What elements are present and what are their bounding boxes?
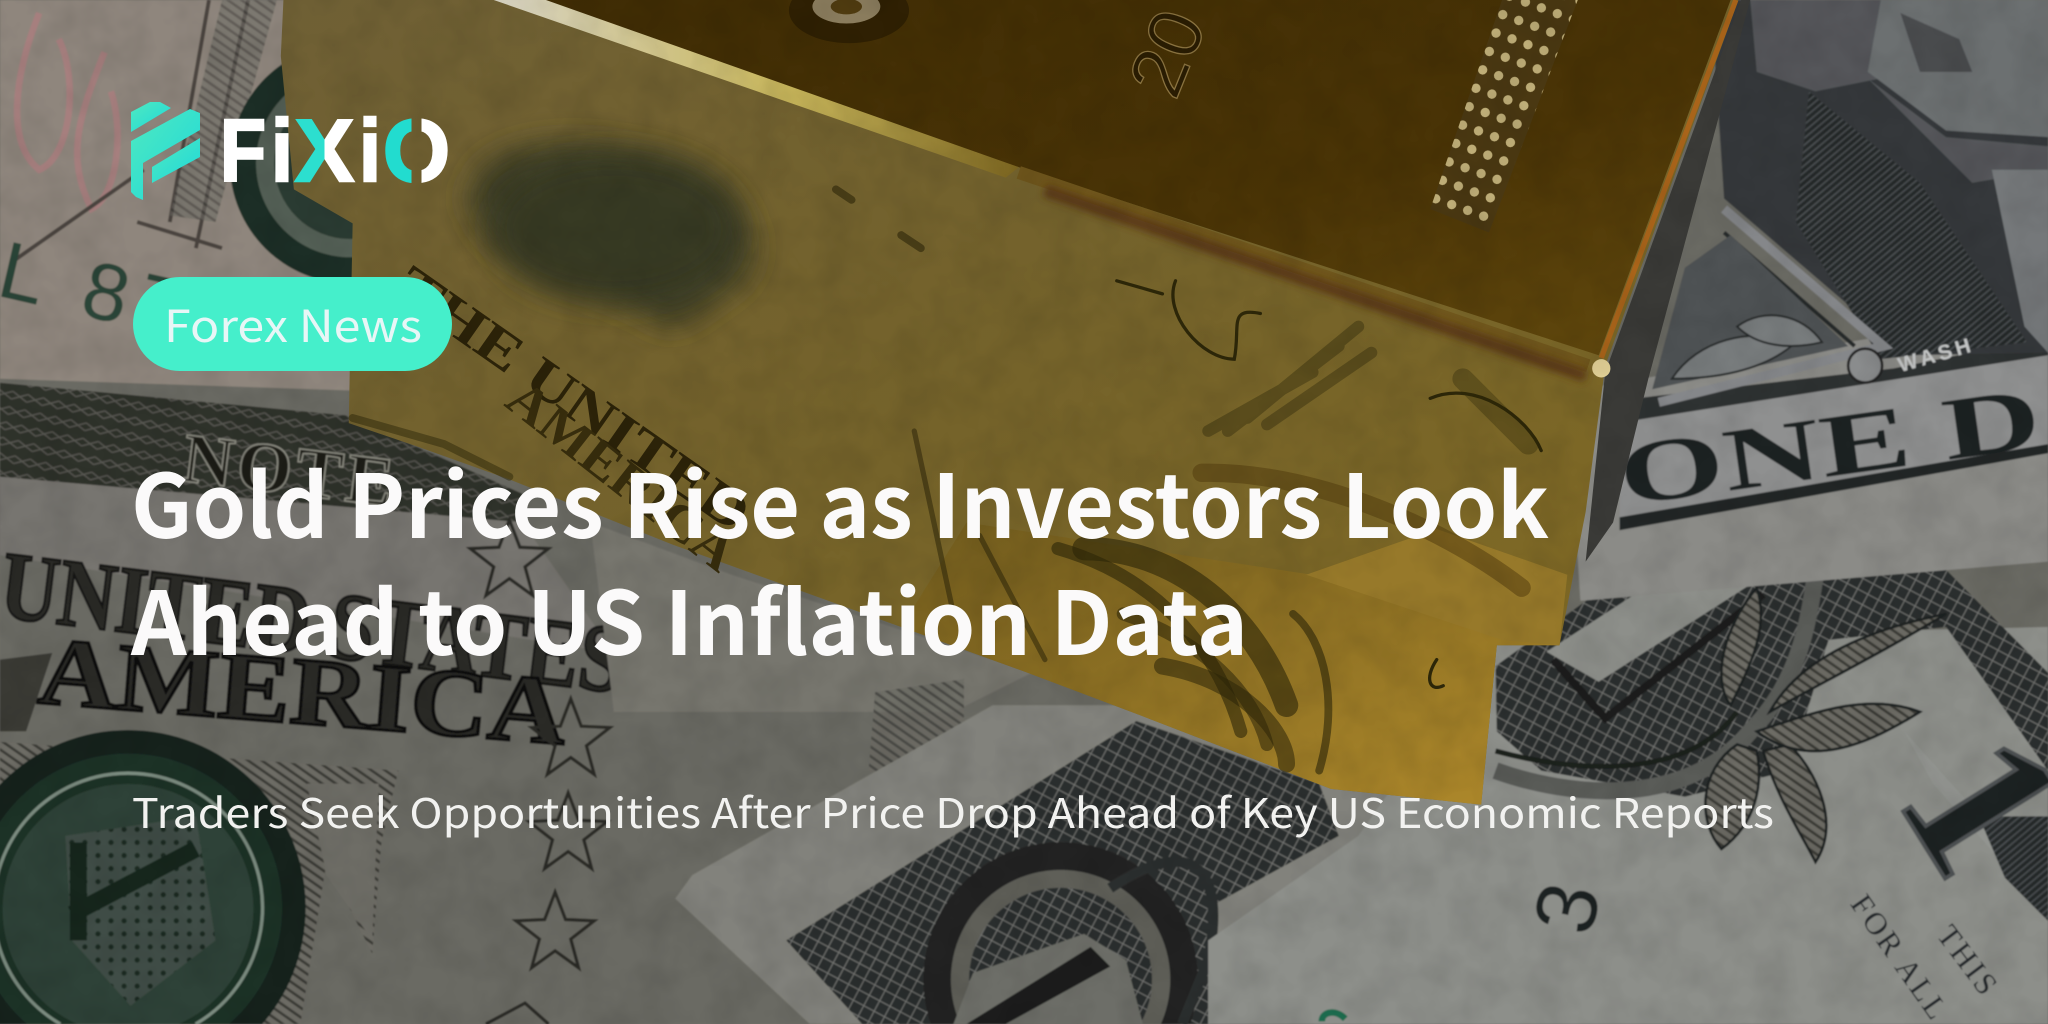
upper right polish bbox=[1306, 529, 1567, 645]
dark reflection blob bbox=[469, 142, 752, 327]
logo wordmark: i bbox=[271, 101, 293, 200]
logo bbox=[131, 101, 450, 200]
logo wordmark: F bbox=[220, 101, 266, 200]
ONE dollar note: ONE D bbox=[1613, 369, 2047, 525]
reflected note print bbox=[353, 189, 1541, 771]
laurel bbox=[1672, 315, 1822, 379]
Washington portrait: WASH bbox=[1895, 333, 1977, 377]
top face bbox=[503, 0, 1731, 355]
headline: Gold Prices Rise as Investors Look bbox=[131, 437, 1549, 564]
reflected note print: AMERICA bbox=[495, 369, 748, 583]
red-brown edge bbox=[1045, 191, 1586, 376]
numeral shading bbox=[1979, 816, 2048, 921]
lower bar face bbox=[901, 522, 1560, 805]
middle note bbox=[590, 522, 1032, 712]
logo wordmark: i bbox=[359, 101, 381, 200]
logo mark bbox=[131, 102, 200, 200]
treasury seal bbox=[0, 730, 306, 1024]
secondary reflection bbox=[490, 153, 738, 304]
NOTE strip: NOTE bbox=[178, 419, 402, 523]
lower note bbox=[675, 705, 2048, 1024]
reflected note print: THE UNITED bbox=[385, 254, 762, 543]
gold bars bbox=[281, 0, 1750, 805]
Washington portrait bbox=[1652, 0, 2048, 402]
wreath leaves bbox=[1705, 588, 1946, 862]
pill label: Forex News bbox=[164, 291, 422, 355]
lower-right note bbox=[1208, 525, 2048, 1024]
highlight streak bbox=[494, 0, 1019, 178]
stamped year: 20 bbox=[1112, 0, 1223, 108]
ONE dollar note bbox=[1567, 307, 2048, 601]
top-left banknote bbox=[0, 0, 470, 392]
logo wordmark: X bbox=[295, 101, 354, 200]
legal tender text: FOR ALL bbox=[1844, 888, 1956, 1024]
lower-right note: THIS bbox=[1930, 918, 2006, 1003]
right side reflection bbox=[1586, 0, 1750, 562]
NOTE strip bbox=[0, 383, 614, 653]
headline bbox=[130, 437, 1549, 681]
right edge glint bbox=[1601, 0, 1736, 358]
pill background bbox=[133, 277, 452, 371]
stamped hole bbox=[789, 0, 909, 43]
front face bbox=[281, 0, 1738, 805]
UNITED STATES OF AMERICA lettering: UNITED STATES bbox=[0, 531, 630, 714]
stamped serial strip bbox=[1430, 0, 1578, 232]
headline: Ahead to US Inflation Data bbox=[130, 554, 1248, 681]
hatch panel bbox=[0, 742, 398, 1024]
logo wordmark: O bbox=[383, 101, 450, 200]
corner glint bbox=[1592, 359, 1610, 377]
stars bbox=[470, 520, 610, 1024]
bar edge band bbox=[1019, 172, 1588, 366]
subtitle: Traders Seek Opportunities After Price Drop Ahead of Key US Economic Reports bbox=[132, 780, 1774, 840]
serial 3: 3 bbox=[1516, 875, 1619, 942]
category pill bbox=[133, 277, 452, 371]
UNITED STATES OF AMERICA lettering: AMERICA bbox=[35, 617, 571, 765]
